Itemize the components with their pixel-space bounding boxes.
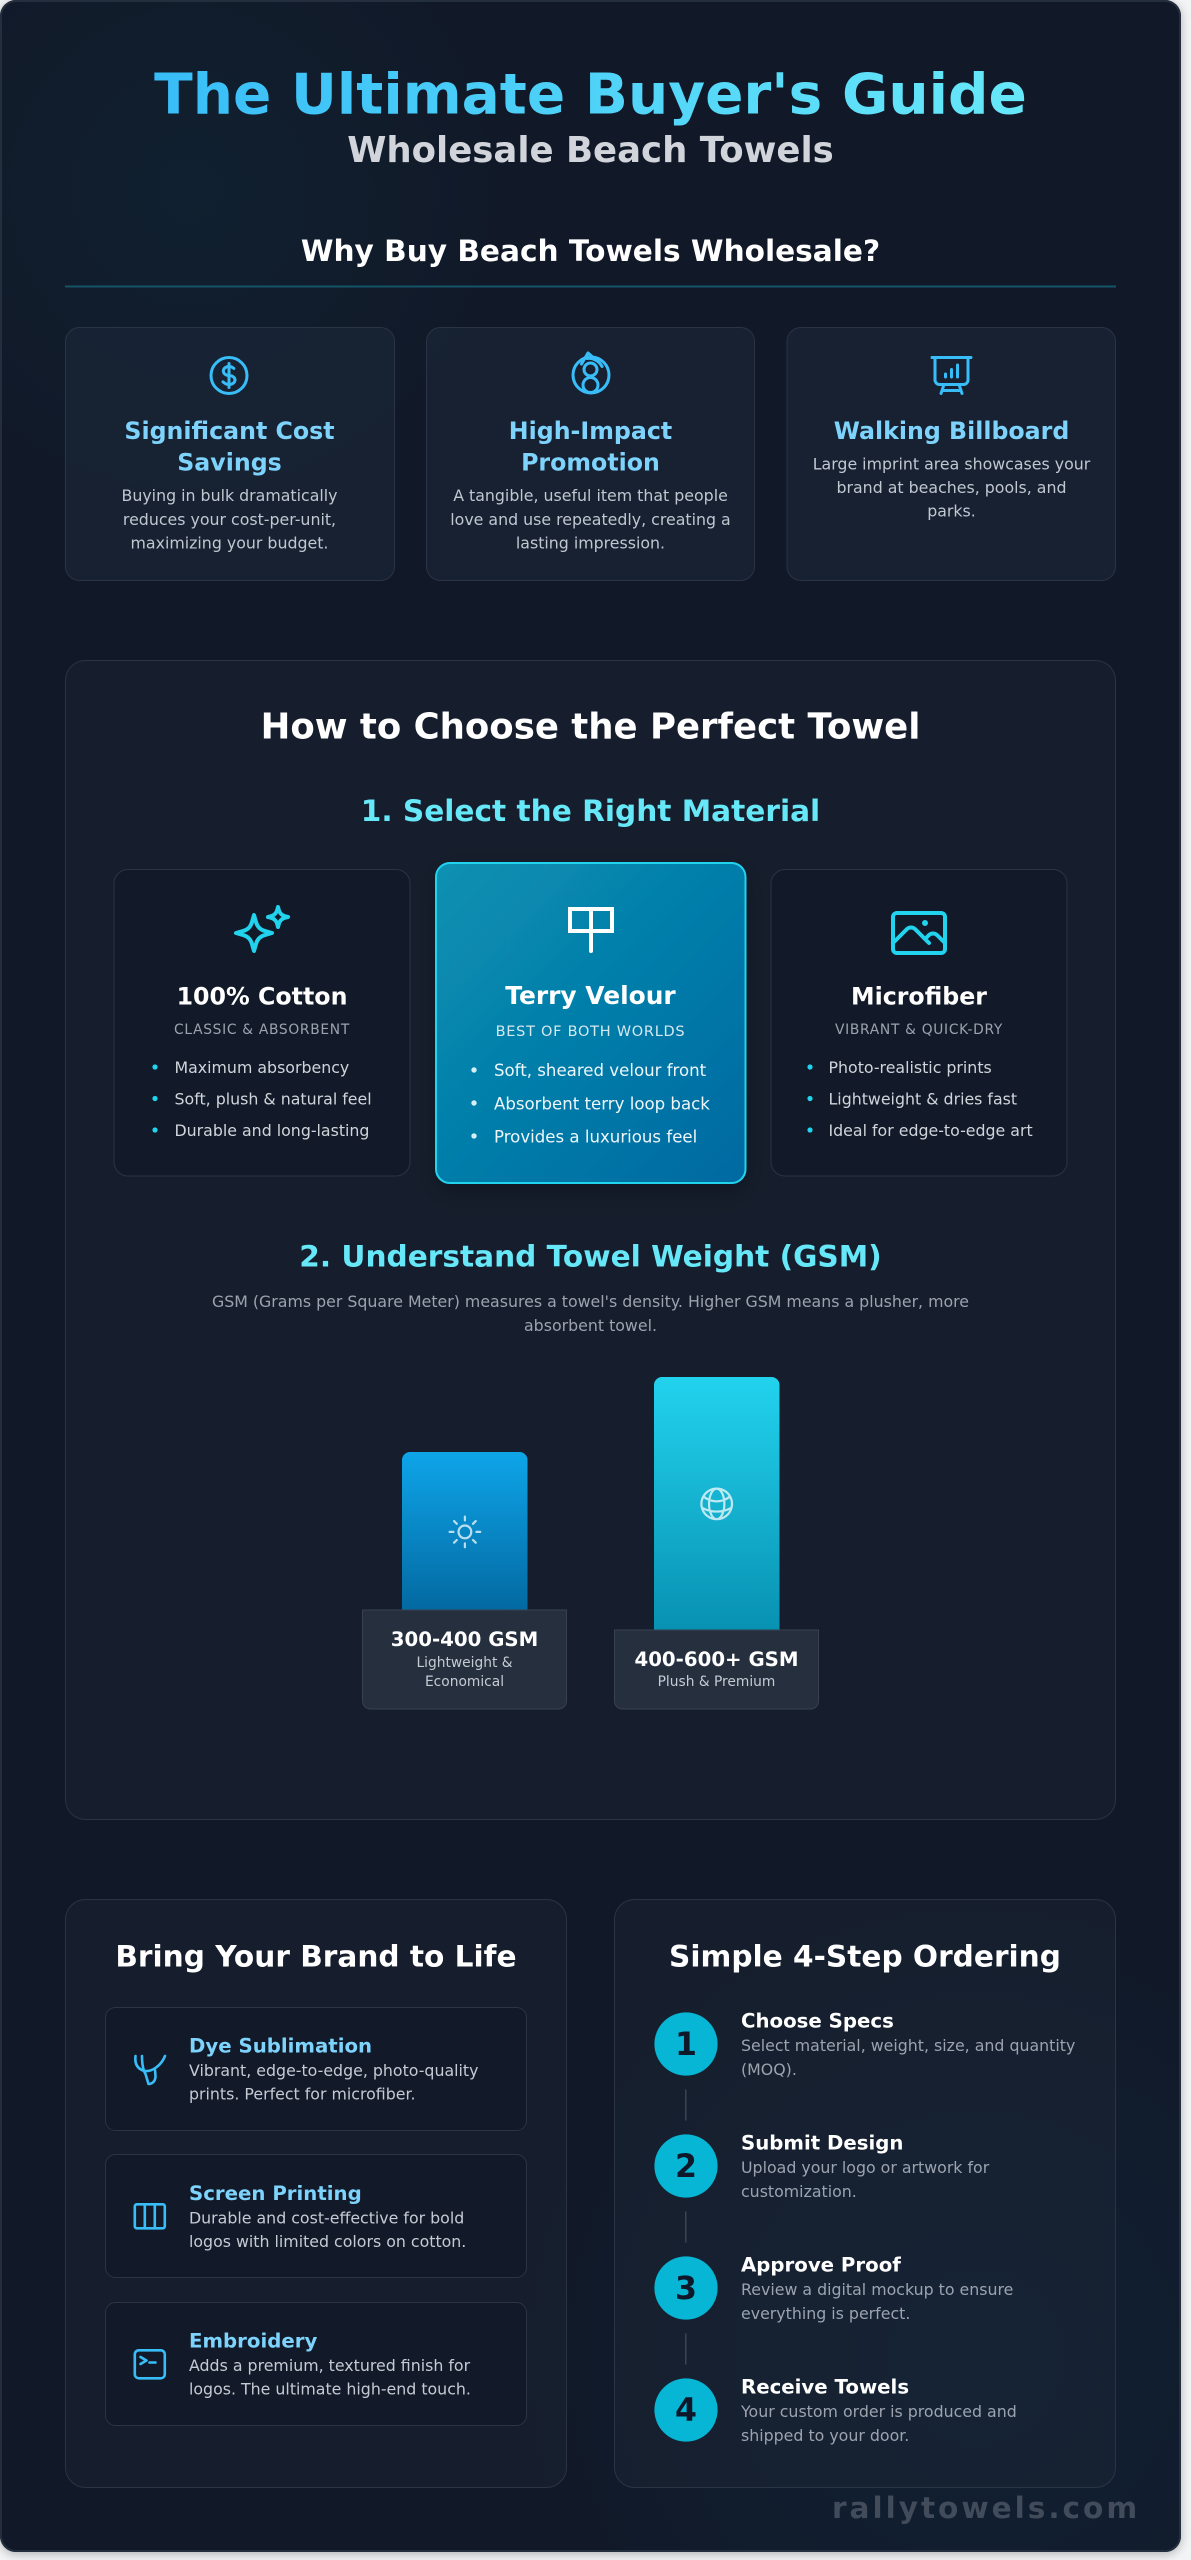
card text: maximizing your budget. <box>131 534 328 552</box>
item text: logos. The ultimate high-end touch. <box>189 2380 471 2398</box>
list: Soft, sheared velour front <box>494 1061 707 1080</box>
step number <box>654 2012 718 2076</box>
subheading: material: 1. Select the Right Material <box>361 794 820 828</box>
card text: parks. <box>927 502 976 520</box>
list: Durable and long-lasting <box>174 1121 369 1140</box>
step number: 4 <box>675 2393 697 2429</box>
card text: Large imprint area showcases your <box>813 454 1091 474</box>
panel: how to choose the perfect towel <box>66 660 1116 1820</box>
item: dye sublimation <box>106 2008 526 2130</box>
label text: Lightweight & <box>416 1655 513 1671</box>
step text: Review a digital mockup to ensure <box>741 2280 1013 2299</box>
step text: customization. <box>741 2182 857 2201</box>
step 4 <box>654 2376 1017 2445</box>
icon: promotion <box>573 353 609 393</box>
step text: everything is perfect. <box>741 2304 910 2323</box>
step 2 <box>654 2132 990 2201</box>
label box <box>614 1630 818 1709</box>
icon: embroidery <box>135 2350 165 2378</box>
icon: dollar <box>211 358 247 394</box>
card text: love and use repeatedly, creating a <box>450 510 731 529</box>
subheading: gsm: 2. Understand Towel Weight (GSM) <box>299 1240 882 1274</box>
watermark: rallytowels.com: rallytowels.com <box>832 2491 1140 2525</box>
panel: walking billboard <box>787 328 1116 580</box>
item title: Screen Printing <box>189 2182 362 2205</box>
card title: Savings <box>177 448 282 476</box>
card: microfiber <box>771 870 1067 1176</box>
card text: A tangible, useful item that people <box>453 486 728 505</box>
card: terry velour <box>436 863 746 1183</box>
list: Provides a luxurious feel <box>494 1128 697 1146</box>
gsm description: absorbent towel. <box>524 1316 657 1335</box>
step number: 2 <box>675 2149 697 2185</box>
step title: Choose Specs <box>741 2010 894 2032</box>
list: Maximum absorbency <box>174 1058 349 1077</box>
list: Soft, plush & natural feel <box>174 1090 372 1108</box>
label title: 300-400 GSM <box>391 1628 538 1651</box>
card tagline: BEST OF BOTH WORLDS <box>496 1024 685 1040</box>
label text: Plush & Premium <box>658 1674 775 1690</box>
step text: Upload your logo or artwork for <box>741 2158 990 2177</box>
card tagline: VIBRANT & QUICK-DRY <box>835 1022 1003 1038</box>
heading: why buy: Why Buy Beach Towels Wholesale? <box>301 234 880 268</box>
icon: dye <box>135 2056 165 2084</box>
label title: 400-600+ GSM <box>634 1648 799 1671</box>
step text: shipped to your door. <box>741 2426 909 2445</box>
panel: high-impact promotion <box>426 328 754 580</box>
heading: how to choose: How to Choose the Perfect Towel <box>261 706 920 748</box>
step number <box>654 2378 718 2442</box>
title: The Ultimate Buyer's Guide: The Ultimate Buyer's Guide <box>154 62 1027 128</box>
card text: Buying in bulk dramatically <box>121 486 338 505</box>
item text: Durable and cost-effective for bold <box>189 2208 464 2228</box>
icon: sun <box>450 1517 480 1547</box>
step number <box>654 2256 718 2320</box>
step title: Receive Towels <box>741 2376 909 2398</box>
icon: sparkles <box>236 907 288 951</box>
step 3 <box>654 2254 1013 2323</box>
list <box>152 1058 372 1140</box>
item: screen printing <box>106 2154 526 2278</box>
card text: reduces your cost-per-unit, <box>123 510 336 529</box>
panel: bring your brand to life <box>66 1900 566 2488</box>
item text: Vibrant, edge-to-edge, photo-quality <box>189 2061 478 2080</box>
list <box>807 1058 1033 1140</box>
panel: simple 4-step ordering <box>614 1900 1116 2488</box>
item text: Adds a premium, textured finish for <box>189 2356 471 2375</box>
step number: 3 <box>675 2271 697 2307</box>
bar: 400-600+ gsm <box>614 1377 818 1709</box>
card title: Significant Cost <box>124 417 335 445</box>
step title: Submit Design <box>741 2132 903 2154</box>
card text: brand at beaches, pools, and <box>836 478 1067 497</box>
step text: Select material, weight, size, and quantity <box>741 2036 1075 2055</box>
item: embroidery <box>106 2302 526 2426</box>
card title: Walking Billboard <box>834 417 1069 445</box>
step text: Your custom order is produced and <box>740 2402 1017 2421</box>
list: Lightweight & dries fast <box>828 1090 1017 1108</box>
step 1 <box>654 2010 1075 2079</box>
card title: 100% Cotton <box>177 982 347 1010</box>
card tagline: CLASSIC & ABSORBENT <box>174 1022 350 1038</box>
panel: significant cost savings <box>66 328 394 580</box>
gsm description: GSM (Grams per Square Meter) measures a towel's density. Higher GSM means a plusher, more <box>212 1292 969 1311</box>
item title: Dye Sublimation <box>189 2034 372 2058</box>
list: Absorbent terry loop back <box>494 1094 710 1114</box>
item text: prints. Perfect for microfiber. <box>189 2084 416 2104</box>
card text: lasting impression. <box>516 534 665 552</box>
icon: globe <box>701 1489 732 1519</box>
card: 100% cotton <box>114 870 410 1176</box>
card title: Terry Velour <box>505 981 676 1010</box>
card title: High-Impact <box>509 417 672 445</box>
icon: presentation chart <box>932 358 971 394</box>
list <box>471 1061 710 1146</box>
card title: Promotion <box>521 448 660 476</box>
step number <box>654 2134 718 2198</box>
step number: 1 <box>675 2027 697 2063</box>
icon: image <box>893 913 945 953</box>
heading: Simple 4-Step Ordering <box>669 1940 1061 1974</box>
item text: logos with limited colors on cotton. <box>189 2232 466 2251</box>
card title: Microfiber <box>851 982 987 1010</box>
section: why buy wholesale <box>65 234 1116 580</box>
list: Photo-realistic prints <box>828 1058 992 1077</box>
bar chart: gsm weights <box>362 1377 818 1709</box>
icon: terry <box>570 909 612 951</box>
icon: screen <box>135 2204 165 2228</box>
heading: Bring Your Brand to Life <box>115 1940 517 1974</box>
step text: (MOQ). <box>741 2060 797 2079</box>
list: Ideal for edge-to-edge art <box>828 1121 1033 1140</box>
bar: 300-400 gsm <box>362 1452 566 1709</box>
label box <box>362 1610 566 1709</box>
subtitle: Wholesale Beach Towels <box>347 130 834 171</box>
step title: Approve Proof <box>741 2254 901 2276</box>
label text: Economical <box>425 1674 504 1690</box>
item title: Embroidery <box>189 2330 317 2352</box>
